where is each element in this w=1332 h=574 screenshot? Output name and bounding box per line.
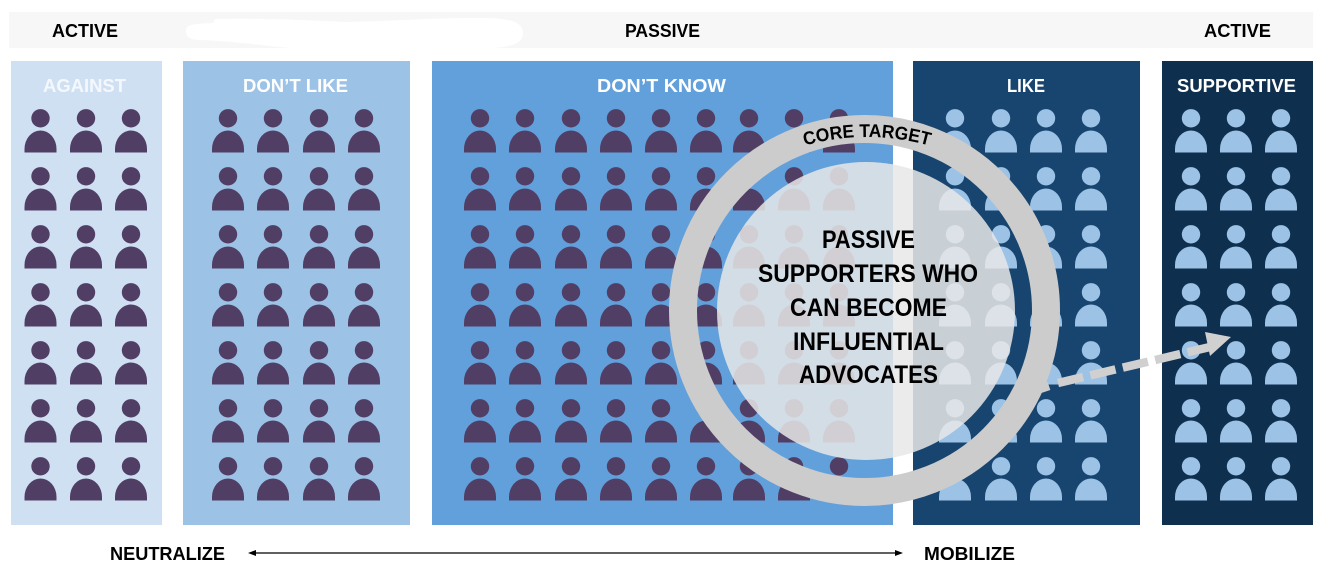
header band: [9, 12, 1313, 48]
panel: don't know: [432, 61, 893, 525]
core target description: INFLUENTIAL: [793, 328, 944, 356]
core target description: SUPPORTERS WHO: [758, 260, 978, 288]
panel title: don't like: DON’T LIKE: [243, 76, 348, 96]
bottom label: mobilize: MOBILIZE: [924, 544, 1015, 564]
people: like: [939, 109, 1107, 500]
panel title: don't know: DON’T KNOW: [597, 76, 726, 96]
panel: don't like: [183, 61, 410, 525]
panel: supportive: [1162, 61, 1313, 525]
redacted white blob: [186, 18, 523, 48]
core target description: ADVOCATES: [799, 361, 938, 389]
translucent core circle: [717, 162, 1015, 460]
people: against: [24, 109, 147, 500]
label: active left: ACTIVE: [52, 21, 118, 41]
ring label: core target: CORE TARGET: [804, 124, 932, 144]
core target description: CAN BECOME: [790, 294, 947, 322]
panel: against: [11, 61, 162, 525]
people: don't know: [464, 109, 855, 500]
bottom label: neutralize: NEUTRALIZE: [110, 544, 225, 564]
double-headed arrow: [248, 550, 903, 556]
core target description: PASSIVE: [822, 226, 915, 254]
people: supportive: [1175, 109, 1297, 500]
label: passive: PASSIVE: [625, 21, 700, 41]
dashed arrow to supportive: [1040, 332, 1231, 389]
panel title: supportive: SUPPORTIVE: [1177, 76, 1296, 96]
label: active right: ACTIVE: [1204, 21, 1271, 41]
panel title: like: LIKE: [1007, 76, 1045, 96]
panel: like: [913, 61, 1140, 525]
panel title: against: AGAINST: [43, 76, 126, 96]
core target ring: [683, 129, 1046, 492]
people: don't like: [212, 109, 380, 500]
core target description: [758, 226, 978, 389]
